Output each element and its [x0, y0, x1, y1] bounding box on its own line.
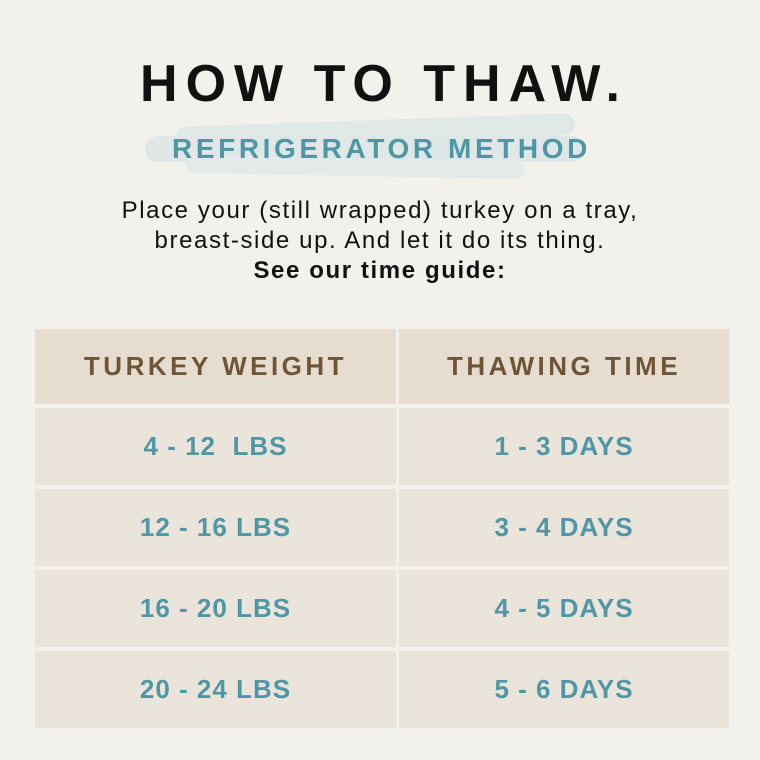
header: turkey weight: TURKEY WEIGHT	[84, 351, 347, 381]
row 1 weight: 4 - 12 LBS	[144, 431, 287, 461]
row 3 time: 4 - 5 DAYS	[494, 593, 634, 623]
header: thawing time: THAWING TIME	[447, 351, 681, 381]
description text: Place your (still wrapped) turkey on a tray,	[122, 197, 638, 224]
description text	[122, 197, 638, 284]
row 1 weight	[35, 408, 396, 485]
table: thaw times	[35, 329, 729, 728]
row 4 weight	[35, 651, 396, 728]
subtitle: REFRIGERATOR METHOD	[172, 133, 591, 164]
row 2 time: 3 - 4 DAYS	[494, 512, 634, 542]
row 4 time	[399, 651, 729, 728]
row 2 weight: 12 - 16 LBS	[140, 512, 291, 542]
description text: breast-side up. And let it do its thing.	[155, 227, 605, 254]
row 2 time	[399, 489, 729, 566]
row 4 weight: 20 - 24 LBS	[140, 674, 291, 704]
description text: See our time guide:	[253, 257, 507, 284]
row 3 weight: 16 - 20 LBS	[140, 593, 291, 623]
row 1 time: 1 - 3 DAYS	[494, 431, 634, 461]
brush stroke decoration	[145, 114, 582, 178]
row 2 weight	[35, 489, 396, 566]
row 3 time	[399, 570, 729, 647]
row 1 time	[399, 408, 729, 485]
title: HOW TO THAW.	[140, 55, 628, 113]
row 4 time: 5 - 6 DAYS	[494, 674, 634, 704]
header: turkey weight	[35, 329, 396, 404]
header: thawing time	[399, 329, 729, 404]
row 3 weight	[35, 570, 396, 647]
